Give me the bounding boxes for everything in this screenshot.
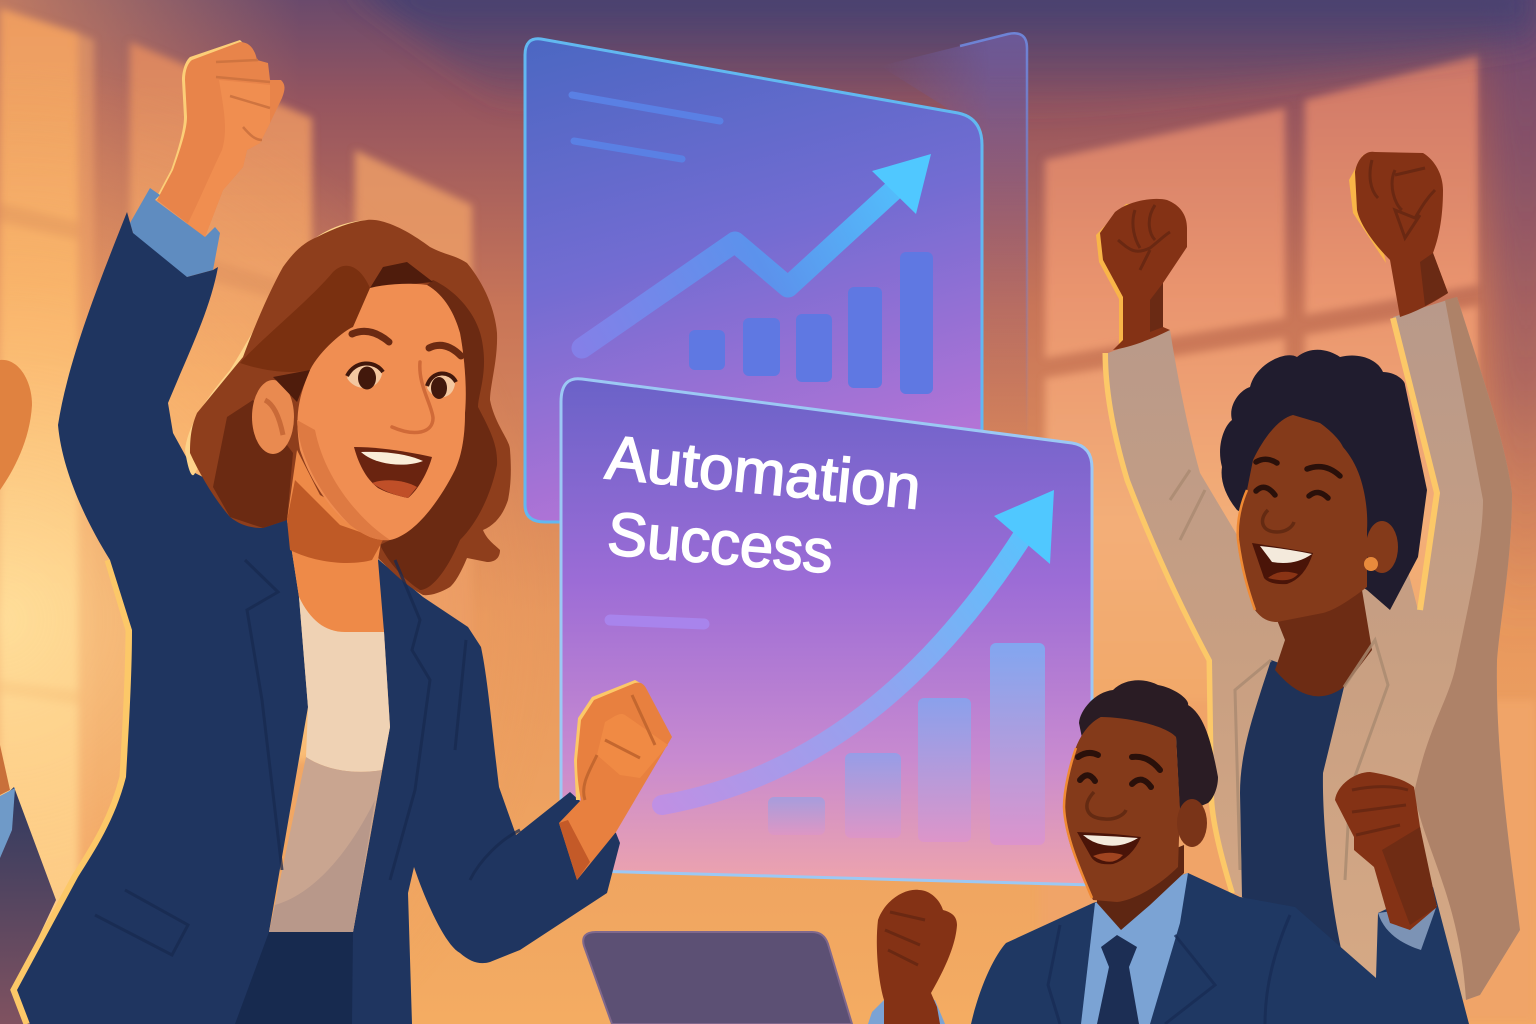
blazer xyxy=(17,212,620,1024)
raised fist left xyxy=(1096,199,1187,350)
head xyxy=(1064,717,1180,902)
ear and earring xyxy=(1364,521,1398,573)
arrow: rising trend line xyxy=(582,154,931,348)
right woman: cheering xyxy=(1096,152,1520,1000)
trousers xyxy=(235,932,353,1024)
right fist xyxy=(1335,772,1437,930)
face rim light xyxy=(1064,748,1092,898)
ear xyxy=(252,370,310,454)
lapels xyxy=(1048,915,1290,1024)
raised forearm and fist xyxy=(155,40,284,237)
left woman: main cheering figure xyxy=(14,40,672,1024)
shirt xyxy=(1081,873,1188,1024)
title text: Automation xyxy=(603,423,924,523)
face rim light xyxy=(1238,490,1255,610)
low fist xyxy=(559,680,672,880)
laughing mouth xyxy=(1252,543,1313,584)
face xyxy=(1237,415,1367,622)
bar chart xyxy=(768,643,1045,845)
arm inner rim light xyxy=(1393,318,1437,610)
beige jacket xyxy=(1108,297,1520,1000)
man: seated and laughing xyxy=(868,680,1469,1024)
eyes xyxy=(347,363,456,399)
panel: upper growth chart xyxy=(525,39,982,522)
navy suit xyxy=(971,873,1469,1024)
eyes closed xyxy=(1078,753,1160,787)
jacket shaded side xyxy=(1414,297,1520,1000)
hair shadow right xyxy=(380,280,497,590)
nose xyxy=(1087,792,1126,819)
right cuff xyxy=(1378,905,1437,950)
white shirt xyxy=(299,597,390,772)
placeholder line xyxy=(610,620,704,624)
smile xyxy=(1077,832,1141,864)
title text xyxy=(603,423,924,586)
panel: automation success xyxy=(561,379,1092,885)
open mouth xyxy=(354,447,432,498)
curly hair xyxy=(1220,350,1427,610)
hair parting xyxy=(370,262,433,288)
tie xyxy=(1097,935,1139,1024)
face xyxy=(297,284,466,540)
laptop xyxy=(583,932,852,1024)
nose xyxy=(392,362,433,433)
face shade xyxy=(297,420,390,540)
left cuff xyxy=(868,1000,945,1024)
lapel lines xyxy=(95,560,520,955)
blazer rim light xyxy=(14,560,129,1024)
hair cream rim xyxy=(185,220,367,475)
placeholder lines xyxy=(572,95,720,159)
eyes closed xyxy=(1256,459,1340,498)
title text: Success xyxy=(605,499,836,586)
eyebrows xyxy=(352,331,461,356)
neck xyxy=(287,450,384,632)
hair shadow left xyxy=(240,266,370,372)
raised fist right xyxy=(1349,152,1448,320)
hair xyxy=(1079,680,1218,815)
neck xyxy=(1097,845,1184,930)
left fist xyxy=(877,890,957,1024)
back panel: faint glass screen xyxy=(900,32,1028,424)
sleeve cuff xyxy=(130,188,220,277)
lapel shading xyxy=(1170,470,1388,880)
hair shadow lower left xyxy=(213,400,293,528)
bar chart xyxy=(689,252,933,394)
hair xyxy=(190,220,511,595)
arrow: growth curve xyxy=(662,490,1054,805)
jacket rim light xyxy=(1106,353,1233,893)
far left person: raised fist xyxy=(0,360,56,1024)
nose xyxy=(1262,510,1294,532)
ear xyxy=(1177,799,1207,847)
navy top xyxy=(1240,660,1344,953)
neck xyxy=(1275,590,1372,696)
